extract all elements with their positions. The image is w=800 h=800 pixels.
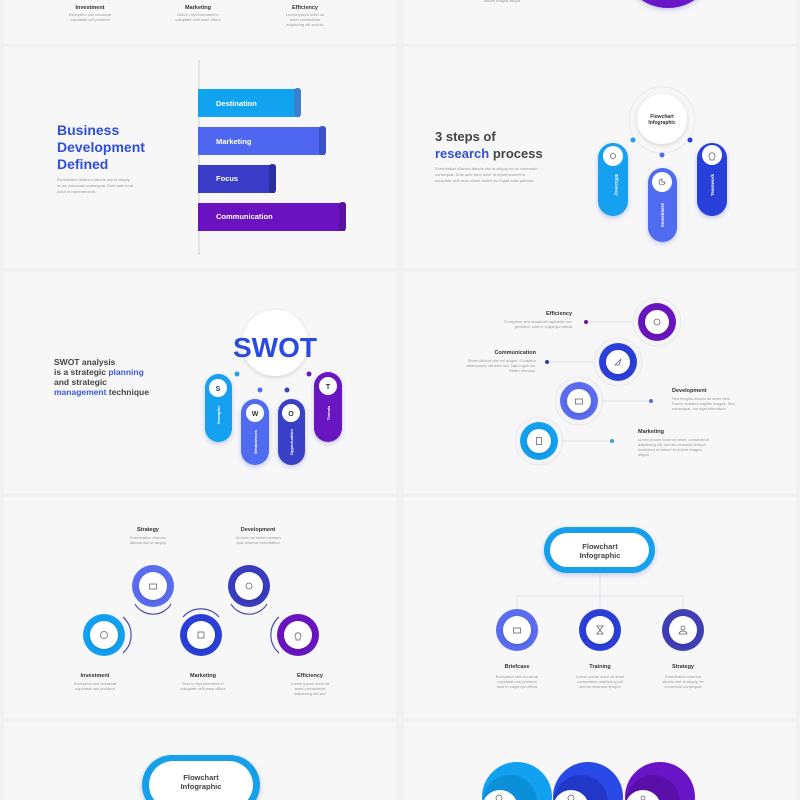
panel: top-left partial: Excepteur sint occaecat [69, 12, 112, 17]
panel: zigzag circles: Lorem ipsum dolor sit [291, 681, 330, 686]
panel: diagonal steps: ullamcorper ultricies nisi. Nam eget dui. [466, 363, 536, 368]
SWOT pills: Opportunities [289, 428, 294, 455]
panel: zigzag circles: laboris nisi ut aliquip [130, 540, 167, 545]
panel: flowchart tree: laboris nisi ut aliquip ex [662, 679, 704, 684]
panel: top-left partial: voluptate velit esse cillum [175, 17, 221, 22]
panel: diagonal steps: aliqua. [638, 452, 650, 457]
SWOT pills: S [216, 386, 221, 393]
panel: top-left partial: Marketing [185, 5, 211, 11]
pills: Efficiency [614, 174, 619, 196]
panel: bottom-left flowchart pill [4, 722, 396, 800]
panel: 3 steps research: research process [435, 146, 543, 161]
panel: 3 steps research: consequat. Duis aute irure dolor in reprehenderit in [435, 172, 525, 177]
panel: top-left partial: amet consectetur [290, 17, 321, 22]
panel: flowchart tree: Flowchart [582, 542, 618, 551]
SWOT title: SWOT [233, 332, 317, 363]
ribbon bars [198, 88, 346, 231]
panel: SWOT: management technique [54, 387, 149, 397]
SWOT pills: Weaknesses [253, 429, 258, 454]
panel: zigzag circles: Investment [80, 673, 110, 679]
panel: zigzag circles: Efficiency [297, 673, 324, 679]
panel: bottom-left flowchart pill: Infographic [181, 782, 221, 791]
panel: 3 steps research: Infographic [648, 120, 676, 126]
panel: business development: dolor in reprehenderit. [57, 189, 96, 194]
SWOT pills: T [326, 384, 331, 391]
panel: top-left partial: Duis in reprehenderit in [177, 12, 219, 17]
panel: zigzag circles: voluptate velit esse cillum [180, 686, 226, 691]
SWOT pills: Strengths [216, 405, 221, 424]
panel: business development [4, 47, 396, 268]
panel: SWOT [4, 272, 396, 493]
panel: zigzag circles: Duis in reprehenderit in [182, 681, 224, 686]
panel: flowchart tree: Excepteur sint occaecat [496, 674, 539, 679]
SWOT pills [205, 372, 342, 465]
ribbon bars: Communication [216, 212, 273, 221]
panel: bottom-left flowchart pill: Flowchart [183, 773, 219, 782]
panel: flowchart tree: sed do eiusmod tempor [579, 684, 622, 689]
panel: business development: Exercitation ullamco laboris nisi ut aliquip [57, 177, 131, 182]
panel: top-left partial: adipiscing elit sed do [286, 22, 324, 27]
panel: 3 steps research: Exercitation ullamco laboris nisi ut aliquip ex ea commodo [435, 166, 538, 171]
panel: 3 steps research [404, 47, 796, 268]
panel: zigzag circles: Ut enim ad minim veniam [235, 535, 281, 540]
panel: diagonal steps: incididunt ut labore et dolore magna [638, 447, 702, 452]
panel: top-left partial: Efficiency [292, 5, 319, 11]
ribbon bars: Focus [216, 174, 238, 183]
panel: zigzag circles: Marketing [190, 673, 216, 679]
panel: business development: Defined [57, 156, 108, 172]
step rings [515, 298, 681, 465]
panel: 3 steps research: Flowchart [650, 114, 674, 120]
panel: 3 steps research: voluptate velit esse cillum dolore eu fugiat nulla pariatur. [435, 178, 534, 183]
panel: flowchart tree: cupidatat non proident [497, 679, 538, 684]
panel: flowchart tree: sunt in culpa qui officia [497, 684, 538, 689]
panel: flowchart tree: Lorem ipsum dolor sit amet [576, 674, 625, 679]
SWOT pills: Threats [326, 405, 331, 420]
panel: zigzag circles: cupidatat non proident [75, 686, 116, 691]
panel: flowchart tree: Briefcase [505, 664, 529, 670]
panel: flowchart tree: Strategy [672, 664, 695, 670]
panel: diagonal steps: Lorem ipsum dolor sit amet, consectetur [638, 437, 710, 442]
panel: business development: Development [57, 139, 145, 155]
panel: diagonal steps: Excepteur sint occaecat cupidatat non [504, 319, 572, 324]
panel: zigzag circles: Strategy [137, 527, 160, 533]
panel: diagonal steps: consequat, leo eget bibendum [672, 406, 726, 411]
panel: flowchart tree: Training [589, 664, 611, 670]
circles [83, 565, 319, 656]
panel: top-right partial [404, 0, 796, 44]
panel: diagonal steps: adipiscing elit, sed do eiusmod tempor [638, 442, 707, 447]
panel: flowchart tree: consectetur adipiscing elit [577, 679, 624, 684]
SWOT pills: O [288, 411, 294, 418]
panel: diagonal steps: Communication [494, 350, 537, 356]
panel: diagonal steps: Efficiency [546, 311, 573, 317]
panel: zigzag circles: Exercitation ullamco [130, 535, 167, 540]
panel: diagonal steps: Sed fringilla mauris sit amet nibh. [672, 396, 731, 401]
panel: diagonal steps: Etiam ultrices nisi vel augue. Curabitur [468, 358, 537, 363]
panel: diagonal steps: proident, sunt in culpa qui officia [515, 324, 573, 329]
panel: top-left partial: cupidatat non proident [70, 17, 111, 22]
panel: zigzag circles: amet consectetur [295, 686, 326, 691]
panel: zigzag circles [4, 497, 396, 718]
panel: zigzag circles: Development [241, 527, 275, 533]
center circle [637, 94, 687, 144]
panel: diagonal steps: Etiam rhoncus. [509, 368, 536, 373]
title: Business [57, 122, 119, 138]
panel: diagonal steps [404, 272, 796, 493]
panel: zigzag circles: Excepteur sint occaecat [74, 681, 117, 686]
panel: diagonal steps: Donec sodales sagittis magna. Sed [672, 401, 735, 406]
panel: SWOT: and strategic [54, 377, 107, 387]
ribbon bars: Destination [216, 99, 257, 108]
panel: zigzag circles: quis nostrud exercitation [236, 540, 280, 545]
ribbon bars: Marketing [216, 137, 252, 146]
panel: flowchart tree: commodo consequat [664, 684, 702, 689]
panel: flowchart tree [404, 497, 796, 718]
panel: top-left partial: Investment [75, 5, 105, 11]
panel: bottom-right circles [404, 722, 796, 800]
panel: diagonal steps: Development [672, 388, 707, 394]
SWOT pills: W [252, 411, 259, 418]
panel: SWOT: SWOT analysis [54, 357, 116, 367]
pills: Teamwork [710, 174, 715, 196]
panel: flowchart tree: Infographic [580, 551, 620, 560]
pills: Investment [660, 203, 665, 227]
panel: diagonal steps: Marketing [638, 429, 664, 435]
panel: business development: ex ea commodo consequat. Duis aute irure [57, 183, 134, 188]
pills [598, 143, 727, 242]
panel: top-left partial [4, 0, 396, 44]
panel: flowchart tree: Exercitation ullamco [665, 674, 702, 679]
panel: SWOT: is a strategic planning [54, 367, 144, 377]
panel: 3 steps research: 3 steps of [435, 129, 496, 144]
panel: zigzag circles: adipiscing elit sed [294, 691, 326, 696]
panel: top-left partial: Lorem ipsum dolor sit [286, 12, 325, 17]
